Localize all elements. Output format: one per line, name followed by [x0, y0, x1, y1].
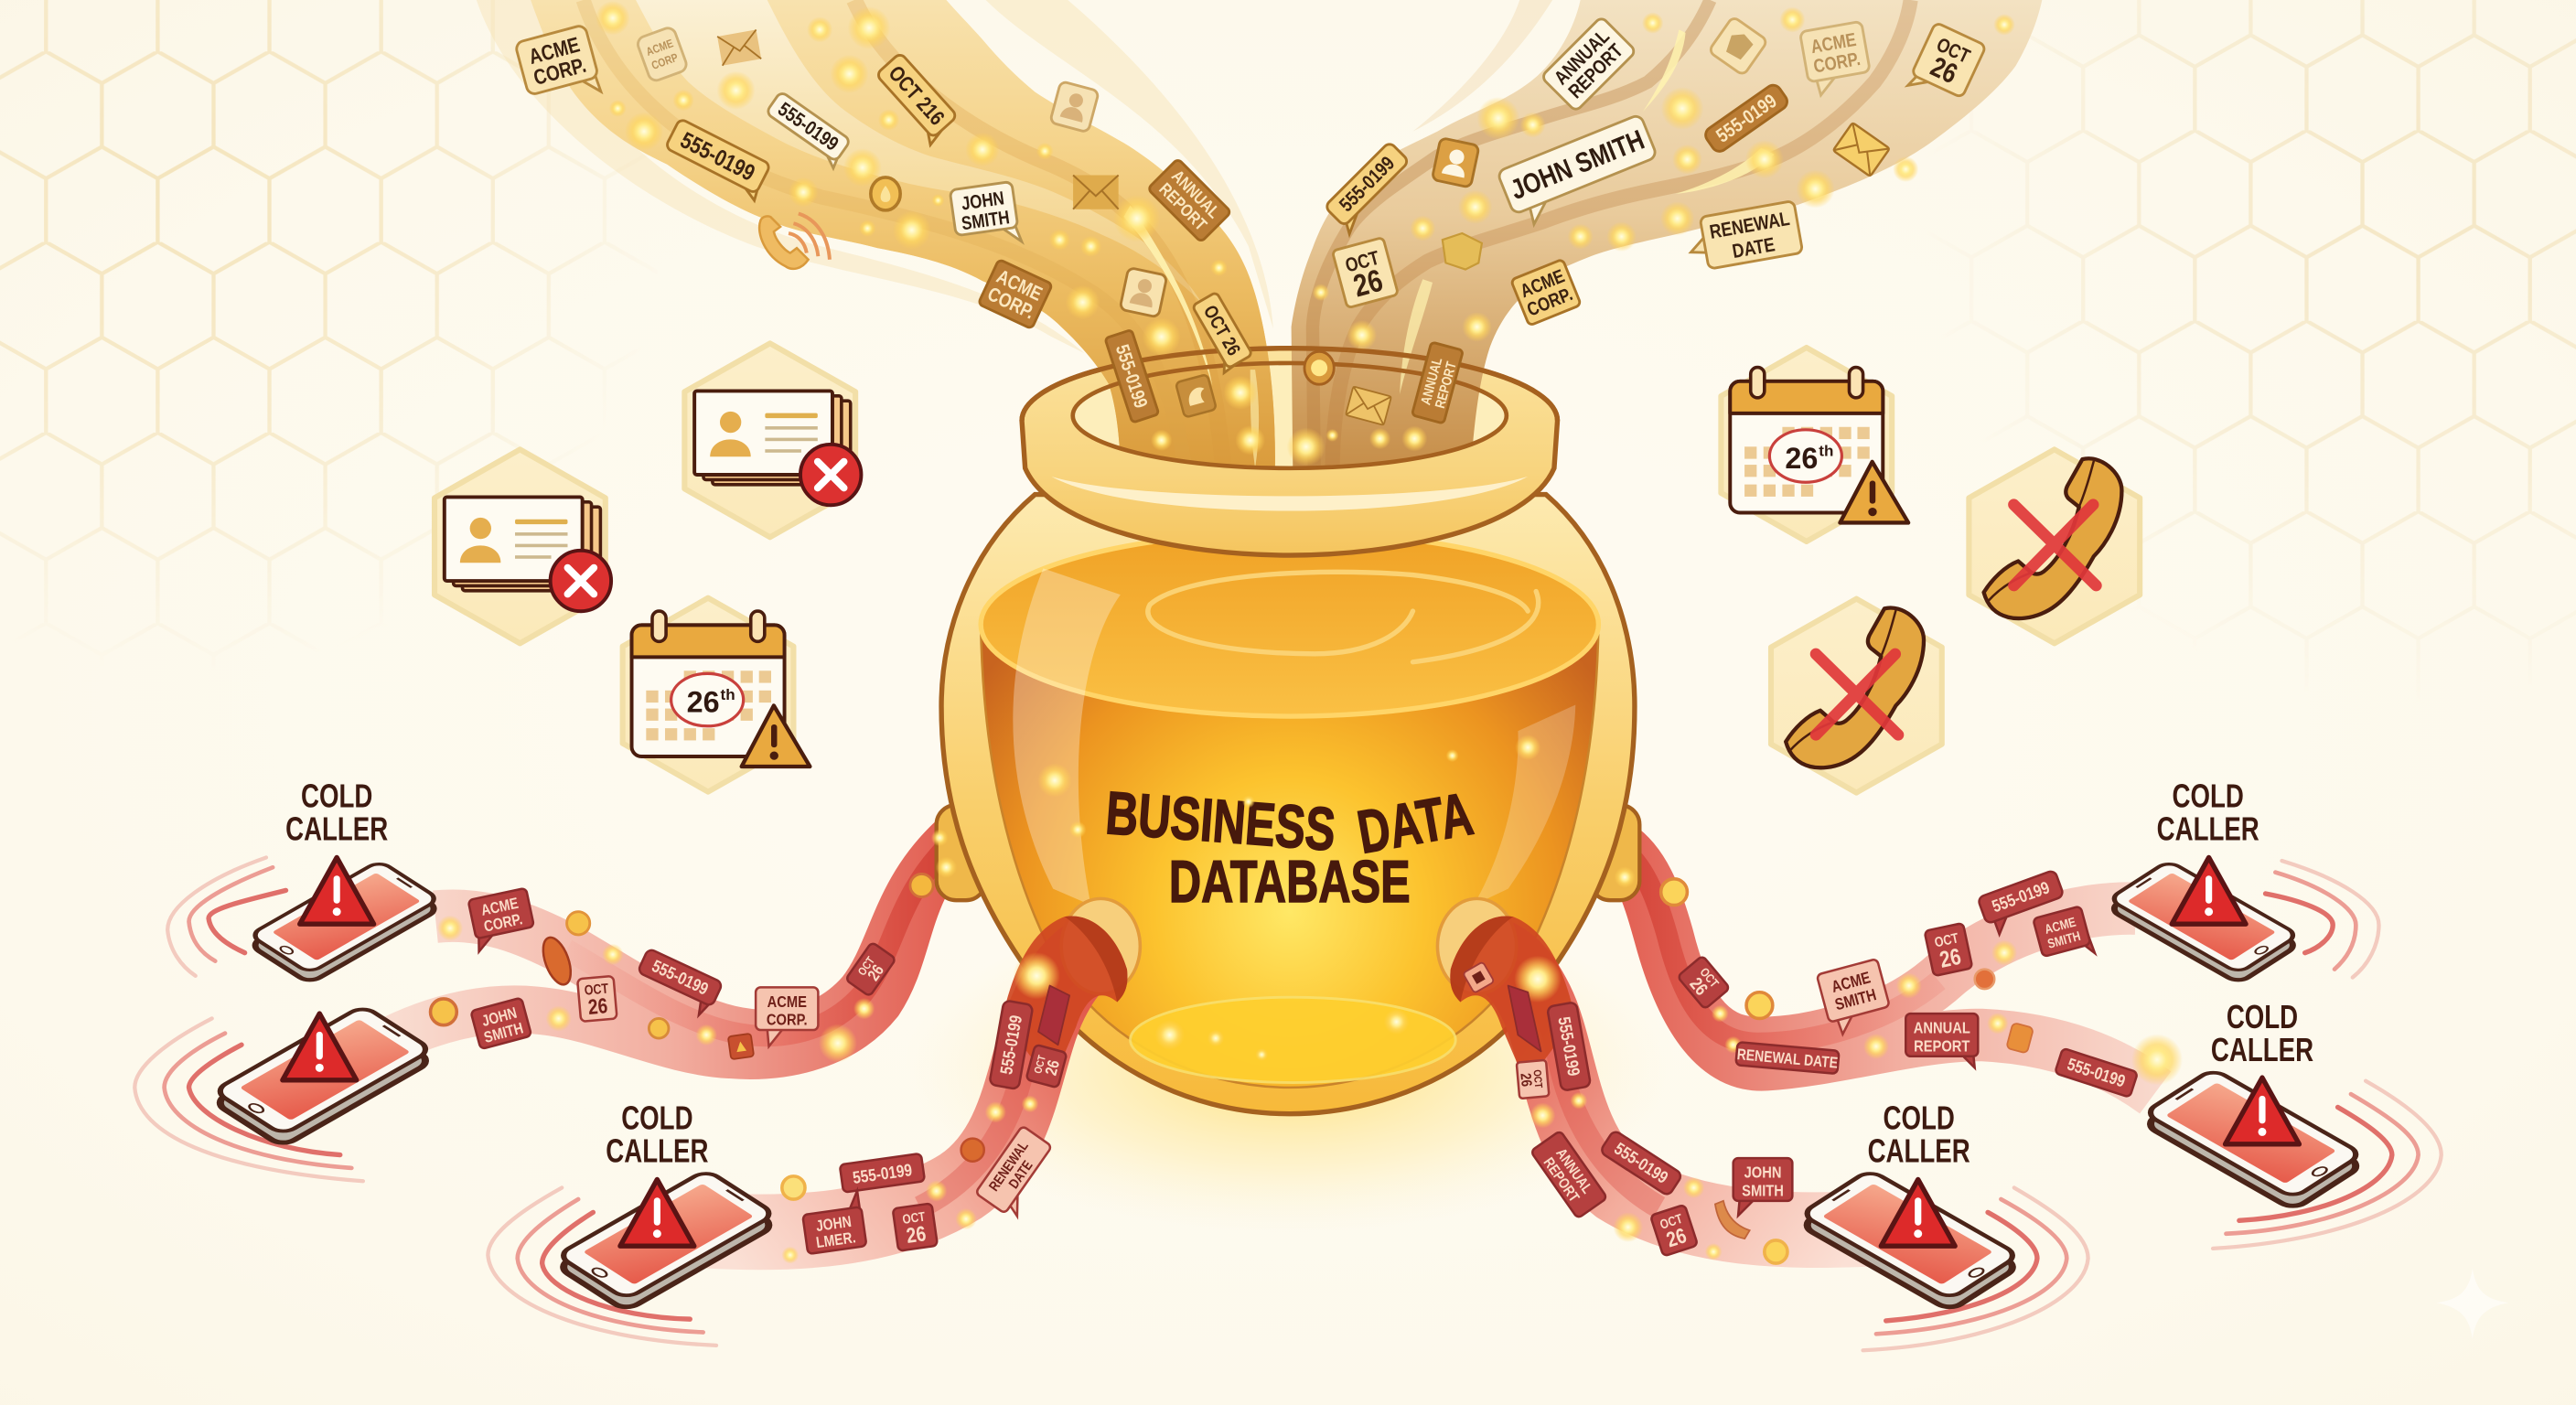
honey pot: glass highlights [1013, 568, 1575, 906]
red pipes behind the pot [370, 842, 2155, 1092]
chip: JOHN LMER.: JOHN [815, 1214, 853, 1235]
chip: OCT 26: OCT [1343, 247, 1381, 277]
phone 6 with warning [1800, 1170, 2019, 1311]
chip: 555-0199: 555-0199 [649, 956, 712, 999]
chip: RENEWAL DATE: RENEWAL [985, 1138, 1031, 1194]
chip: OCT 26 tilted: 26 [864, 961, 887, 984]
chip: 555-0199 vertical: 555-0199 [1554, 1015, 1584, 1078]
phone 1 with warning [250, 857, 439, 983]
icon: honey coin [871, 177, 900, 210]
chip: ACME CORP: CORP. [482, 911, 524, 936]
stream: right data flow into pot [1292, 0, 2042, 477]
chip: RENEWAL DATE: RENEWAL [1708, 208, 1791, 243]
chip: ANNUAL REPORT: ANNUAL [1552, 1146, 1594, 1196]
label: cold caller top right: COLD [2173, 778, 2244, 815]
chip: ACME CORP [515, 25, 603, 110]
icon: coin [1765, 1240, 1787, 1263]
chip: ANNUAL REPORT: REPORT [1564, 40, 1627, 103]
chip: OCT 26 tilted: OCT [856, 955, 877, 978]
chip: OCT 26 vertical pale: OCT [1530, 1069, 1544, 1089]
chip: ANNUAL REPORT: REPORT [1540, 1155, 1582, 1206]
signal waves around phones [134, 857, 2442, 1350]
chip: ACME CORP brown [978, 259, 1053, 329]
chip: OCT 26: OCT [1658, 1211, 1684, 1232]
chip: ACME CORP pale [756, 987, 818, 1046]
chip: OCT 26 tilted: 26 [1686, 973, 1712, 999]
honey pot: honey bottom pool [1131, 997, 1455, 1083]
chip: OCT 26 vertical [1026, 1045, 1067, 1088]
icon: orange tile [2006, 1023, 2034, 1054]
chip: 555-0199 brown: 555-0199 [1712, 91, 1781, 147]
chip: JOHN SMITH: SMITH [1742, 1182, 1784, 1200]
icon: crumpled note [1443, 233, 1482, 270]
chip: OCT 216: OCT 216 [884, 61, 950, 130]
chip: 555-0199 [632, 949, 723, 1019]
chip: 555-0199 [1978, 870, 2069, 938]
honey pot: rim outlines over stream [1022, 349, 1558, 468]
chip: OCT 26 lower: 26 [905, 1221, 928, 1248]
stream: faint right swoosh [1412, 0, 1552, 132]
chip: JOHN SMITH: JOHN [961, 188, 1005, 215]
chip: 555-0199 yellow [1324, 142, 1416, 234]
chip: 555-0199 lower [840, 1153, 925, 1193]
glow under pot [904, 904, 1676, 1232]
label: cold caller top right: CALLER [2157, 810, 2259, 847]
left pipe chips [431, 874, 1069, 1254]
icon: gold coin [567, 912, 590, 935]
hex icon: calendar 26th left: 26 [687, 686, 720, 719]
label: BUSINESS DATA DATABASE [1103, 779, 1477, 916]
glowing data sparks in streams [596, 1, 2015, 467]
chip: ANNUAL REPORT [1541, 16, 1637, 112]
chip: OCT 26 cream [1906, 22, 1986, 108]
label: cold caller mid right: COLD [2227, 999, 2298, 1035]
chip: 555-0199 gold [662, 118, 772, 200]
chip: 555-0199 brown [1702, 82, 1790, 155]
chip: ACME CORP pale: ACME [767, 993, 807, 1011]
chip: 555-0199 yellow: 555-0199 [1336, 153, 1400, 216]
icon: small photo tile [1175, 374, 1217, 418]
label: cold caller mid right: CALLER [2211, 1032, 2313, 1068]
chip: 555-0199 [2055, 1048, 2138, 1098]
icon: person tile gold [1432, 137, 1479, 188]
right stream chips [1304, 16, 1986, 425]
icon: envelope [1073, 176, 1119, 209]
icon: torn diamond [1709, 16, 1768, 76]
chip: OCT 26 vertical: 26 [1042, 1058, 1063, 1078]
chip: 555-0199 white [762, 91, 853, 168]
label: cold caller top left [285, 778, 388, 847]
hex icon: calendar 26th right: 26 [1785, 442, 1818, 475]
chip: OCT 26 [577, 976, 617, 1022]
icon: small red tile [728, 1034, 754, 1059]
label: cold caller lower left: COLD [621, 1099, 693, 1137]
chip: OCT 26 [1650, 1205, 1698, 1256]
chip: ANNUAL REPORT: ANNUAL [1168, 166, 1224, 222]
left pot port [1061, 898, 1140, 994]
chip: ANNUAL REPORT [1148, 158, 1231, 242]
chip: JOHN LMER. [800, 1191, 866, 1254]
chip: 555-0199 vertical [1547, 1002, 1591, 1091]
label: cold caller top left: COLD [301, 778, 372, 815]
icon: orange coin [961, 1139, 984, 1162]
chip: ANNUAL REPORT in pot [1411, 342, 1463, 424]
honeycomb pattern left [0, 0, 617, 622]
sparks inside honey [1037, 735, 1540, 1061]
honey pot: surface swirls [1148, 572, 1539, 662]
hex icon: rejected contact card left [435, 449, 611, 643]
chip: JOHN SMITH [1733, 1158, 1792, 1216]
icon: gold coin in pot [1304, 351, 1334, 384]
chip: ACME CORP brown: ACME [993, 265, 1046, 306]
chip: 555-0199: 555-0199 [1989, 877, 2052, 917]
honey pot: honey inside [981, 624, 1598, 1088]
chip: ANNUAL REPORT: REPORT [1914, 1037, 1970, 1056]
chip: 555-0199 vertical: 555-0199 [996, 1014, 1026, 1076]
label: cold caller top right [2157, 778, 2259, 847]
chip: ANNUAL REPORT [1530, 1131, 1607, 1218]
chip: JOHN SMITH: JOHN [1744, 1164, 1781, 1182]
icon: person badge [1050, 81, 1099, 133]
chip: RENEWAL DATE [975, 1126, 1061, 1220]
label: BUSINESS DATA DATABASE: DATABASE [1169, 849, 1411, 916]
label: BUSINESS DATA DATABASE: DATA [1353, 780, 1477, 867]
label: cold caller lower right: CALLER [1868, 1132, 1970, 1169]
icon: coin [431, 999, 456, 1025]
chip: ANNUAL REPORT in pot: ANNUAL [1417, 355, 1445, 406]
phone 4 with warning [2109, 857, 2299, 983]
chip: RENEWAL DATE: DATE [1731, 234, 1776, 263]
chip: ACME SMITH pale: SMITH [1833, 986, 1878, 1014]
chip: ANNUAL REPORT in pot: REPORT [1432, 359, 1459, 410]
chip: OCT 26: OCT [584, 980, 609, 998]
label: cold caller lower left [606, 1099, 708, 1169]
chip: OCT 26 tilted [1678, 956, 1730, 1009]
stream: faint outer ribbons [477, 0, 1273, 353]
chip: ACME CORP: ACME [479, 896, 520, 919]
chip: JOHN SMITH large [1497, 114, 1663, 230]
chip: JOHN SMITH [950, 181, 1022, 251]
chip: OCT 26 cream: 26 [1926, 50, 1962, 90]
icon: coin orange [1975, 970, 1994, 989]
chip: 555-0199: 555-0199 [2065, 1054, 2128, 1091]
icon: phone ringing [759, 213, 830, 269]
chip: ACME CORP amber: CORP. [1524, 284, 1576, 321]
icon: coin small [649, 1018, 669, 1038]
icon: dark red tag [1508, 986, 1541, 1051]
chip: OCT 26 vertical pale [1516, 1060, 1549, 1099]
chip: OCT 26 tilted: OCT [1697, 965, 1722, 991]
left lower red pipe [706, 949, 1104, 1232]
chip: ACME CORP pale [1799, 21, 1873, 97]
right lower red pipe [1470, 949, 1870, 1230]
chip: OCT 26 cream: OCT [1933, 34, 1973, 68]
icon: orange crescent [538, 934, 576, 988]
hex icon: calendar 26th right [1721, 348, 1908, 542]
hex icon: calendar 26th left [623, 598, 810, 792]
honey pot: rim highlight [1051, 477, 1528, 511]
chip: OCT 26: 26 [1349, 263, 1386, 304]
chip: OCT 26 tilted [845, 942, 896, 997]
chip: 555-0199 in pot [1105, 329, 1159, 423]
chip: ACME CORP brown: CORP. [984, 284, 1037, 324]
icon: person badge lower [1120, 267, 1167, 317]
chip: 555-0199 white: 555-0199 [774, 99, 843, 156]
honey pot: honey surface [981, 532, 1598, 716]
chip: OCT 26: 26 [1937, 943, 1963, 972]
chip: JOHN SMITH: SMITH [961, 208, 1011, 235]
chip: OCT 26 [1187, 292, 1253, 373]
icon: faded envelope [717, 29, 761, 66]
icon: small handset [1715, 1201, 1750, 1239]
chip: ACME SMITH: SMITH [2046, 928, 2082, 951]
icon: coin on pipe [910, 874, 933, 897]
stream: left data flow into pot [531, 0, 1275, 477]
sparks on red pipes [437, 830, 2017, 1263]
chip: ACME CORP pale: ACME [1809, 29, 1858, 59]
chip: OCT 216 [871, 52, 960, 145]
icon: coin upper [1661, 879, 1687, 906]
chip: ANNUAL REPORT: ANNUAL [1914, 1019, 1970, 1037]
chip: RENEWAL DATE: DATE [1005, 1157, 1036, 1191]
right port tube [1450, 916, 1575, 1084]
chip: 555-0199 gold: 555-0199 [676, 126, 759, 186]
hex icon: blocked handset right [1969, 449, 2140, 643]
left stream chips [515, 25, 1253, 423]
right pipe chips [1463, 870, 2183, 1263]
chip: JOHN SMITH [470, 998, 531, 1049]
chip: 555-0199: 555-0199 [1611, 1138, 1672, 1187]
label: cold caller lower left: CALLER [606, 1132, 708, 1169]
chip: RENEWAL DATE [1685, 200, 1803, 272]
chip: ANNUAL REPORT: ANNUAL [1551, 26, 1614, 90]
label: cold caller lower right [1868, 1099, 1970, 1169]
hex icon: rejected contact card upper [684, 343, 861, 537]
hex icon: calendar 26th right: th [1819, 443, 1833, 460]
icon: coin [1746, 992, 1773, 1018]
left port tube [1003, 916, 1127, 1084]
chip: ACME CORP: CORP. [531, 53, 588, 90]
phone 3 with warning [557, 1170, 776, 1311]
chip: 555-0199 lower: 555-0199 [852, 1160, 913, 1187]
chip: OCT 26 vertical: OCT [1032, 1054, 1048, 1075]
chip: ACME CORP amber [1511, 259, 1581, 326]
stream highlights [1123, 29, 1775, 468]
icon: small tile at port [1463, 961, 1494, 993]
honeycomb pattern right [1994, 0, 2576, 636]
label: BUSINESS DATA DATABASE: BUSINESS [1103, 779, 1337, 864]
chip: ACME SMITH: ACME [2043, 914, 2077, 937]
chip: ACME CORP [468, 888, 537, 951]
honey pot: rim band [1022, 349, 1558, 555]
chip: ACME CORP pale: CORP. [1812, 48, 1862, 78]
chip: OCT 26: OCT 26 [1198, 302, 1244, 359]
chip: faint ACME [636, 26, 689, 82]
icon: envelope in pot [1346, 386, 1391, 425]
chip: ACME SMITH pale [1817, 959, 1894, 1036]
honey pot: glass body [941, 495, 1635, 1114]
chip: OCT 26: 26 [1663, 1223, 1690, 1252]
honey pot: rim opening [1073, 363, 1507, 468]
phone 2 with warning [213, 1005, 432, 1147]
chip: ACME CORP pale: CORP. [767, 1011, 808, 1029]
hex icon: blocked handset lower [1771, 599, 1942, 793]
icon: yellow coin [2131, 1034, 2183, 1085]
chip: ACME SMITH pale: ACME [1830, 969, 1873, 996]
phone 5 with warning [2144, 1068, 2363, 1210]
label: cold caller lower right: COLD [1883, 1099, 1955, 1137]
corner sparkle watermark [2436, 1268, 2508, 1339]
chip: OCT 26: OCT [1933, 929, 1960, 950]
chip: OCT 26 [1925, 923, 1972, 976]
icon: yellow envelope [1833, 123, 1890, 177]
chip: ANNUAL REPORT: REPORT [1155, 178, 1211, 235]
right pot port [1437, 898, 1517, 994]
icon: yellow coin [782, 1176, 805, 1199]
chip: ANNUAL REPORT [1905, 1014, 1978, 1067]
hex icon: calendar 26th left: th [721, 686, 735, 703]
chip: OCT 26 vertical pale: 26 [1517, 1073, 1534, 1088]
chip: ACME CORP: ACME [526, 33, 583, 70]
chip: OCT 26 lower [893, 1203, 938, 1251]
chip: ACME CORP amber: ACME [1518, 266, 1568, 303]
chip: faint ACME: CORP [650, 52, 680, 72]
chip: 555-0199 [1600, 1130, 1683, 1196]
chip: faint ACME: ACME [645, 38, 675, 59]
icon: dark red tag [1038, 986, 1069, 1045]
chip: ACME SMITH [2033, 906, 2095, 966]
chip: JOHN SMITH large: JOHN SMITH [1506, 123, 1648, 206]
chip: 555-0199 vertical [989, 1000, 1033, 1089]
label: cold caller top left: CALLER [285, 810, 388, 847]
chip: JOHN LMER.: LMER. [815, 1229, 857, 1252]
chip: RENEWAL DATE: RENEWAL DATE [1736, 1046, 1839, 1072]
chip: JOHN SMITH: SMITH [482, 1020, 525, 1046]
chip: OCT 26 [1332, 237, 1399, 308]
chip: OCT 26 lower: OCT [901, 1208, 926, 1227]
label: cold caller mid right [2211, 999, 2313, 1068]
chip: OCT 26: 26 [587, 993, 608, 1019]
chip: 555-0199 in pot: 555-0199 [1111, 342, 1151, 411]
chip: JOHN SMITH: JOHN [480, 1004, 519, 1030]
honey pot: side lugs [937, 805, 1639, 900]
